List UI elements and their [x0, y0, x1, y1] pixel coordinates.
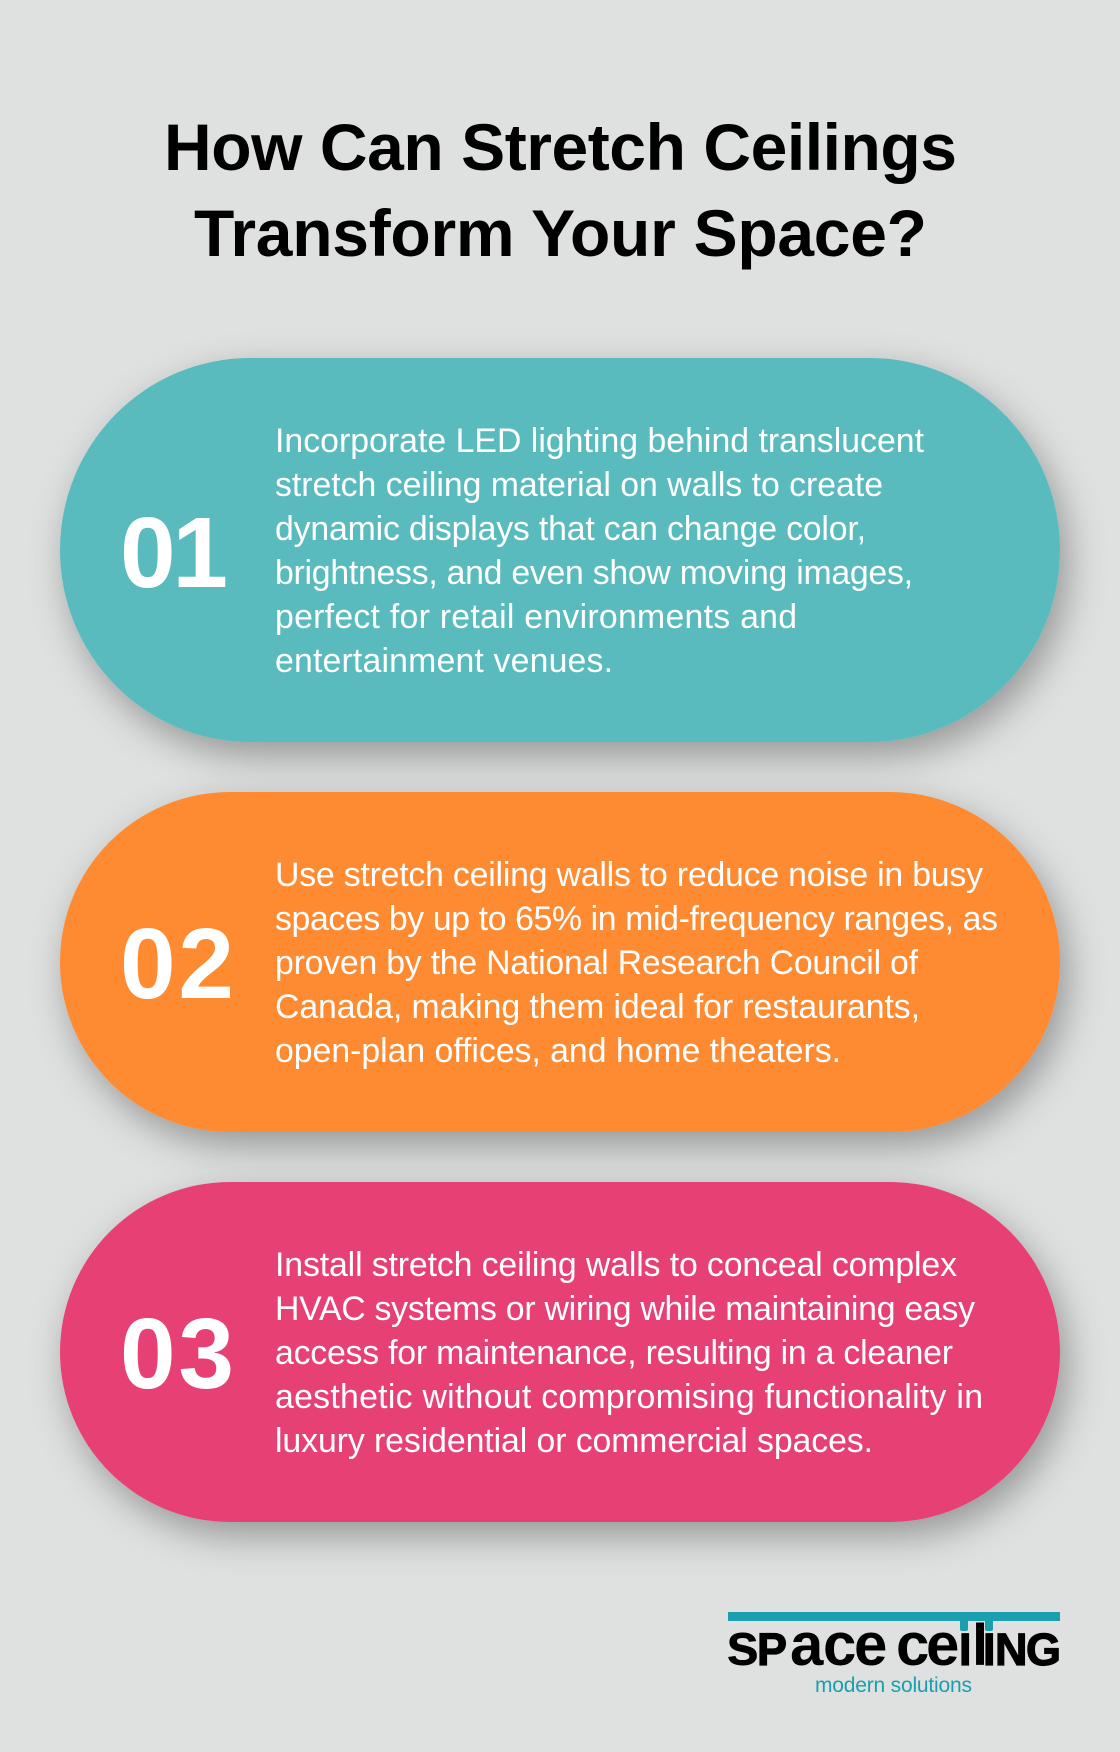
logo wordmark: I: [983, 1624, 996, 1675]
logo wordmark: s: [726, 1611, 759, 1678]
text block: step 01 description: Incorporate LED lighting behind translucent: [275, 422, 925, 460]
panel background: teal pill: [60, 358, 1060, 742]
logo wordmark: e: [854, 1611, 887, 1678]
text block: step 01 description: entertainment venues.: [275, 642, 613, 680]
text block: step 01 description: perfect for retail environments and: [275, 598, 797, 636]
title: Transform Your Space?: [194, 196, 927, 270]
text block: step 03 description: luxury residential or commercial spaces.: [275, 1422, 873, 1460]
logo wordmark: e: [926, 1611, 959, 1678]
logo wordmark: c: [896, 1611, 929, 1678]
logo wordmark: l: [972, 1613, 988, 1678]
text block: step 02 description: proven by the National Research Council of: [275, 944, 919, 982]
text block: step 03 description: access for maintenance, resulting in a cleaner: [275, 1334, 953, 1372]
text block: step 02 description: Canada, making them ideal for restaurants,: [275, 988, 920, 1026]
panel: step 02: [60, 792, 1060, 1132]
text block: step 03 description: Install stretch ceiling walls to conceal complex: [275, 1246, 957, 1284]
text block: step 03 description: [275, 1246, 983, 1460]
panel background: orange pill: [60, 792, 1060, 1132]
panel: step 01: [60, 358, 1060, 742]
panel background: pink pill: [60, 1182, 1060, 1522]
title: [164, 110, 957, 270]
panel: step 03: [60, 1182, 1060, 1522]
step number 02: 02: [120, 908, 234, 1020]
logo wordmark: P: [757, 1624, 787, 1675]
logo ceiling bar: [728, 1612, 1060, 1631]
text block: step 01 description: stretch ceiling material on walls to create: [275, 466, 883, 504]
text block: step 01 description: brightness, and even show moving images,: [275, 554, 913, 592]
logo wordmark: c: [823, 1611, 856, 1678]
logo: space ceiling: [726, 1611, 1061, 1697]
text block: step 02 description: spaces by up to 65% in mid-frequency ranges, as: [275, 900, 998, 938]
text block: step 01 description: dynamic displays that can change color,: [275, 510, 866, 548]
text block: step 02 description: open-plan offices, and home theaters.: [275, 1032, 841, 1070]
text block: step 02 description: Use stretch ceiling walls to reduce noise in busy: [275, 856, 983, 894]
step number 01: 01: [120, 497, 228, 609]
logo wordmark: N: [995, 1624, 1028, 1675]
logo tagline: modern solutions: [815, 1674, 972, 1697]
title: How Can Stretch Ceilings: [164, 110, 957, 184]
text block: step 02 description: [275, 856, 998, 1070]
logo wordmark: I: [959, 1624, 972, 1675]
text block: step 01 description: [275, 422, 925, 680]
logo wordmark: a: [790, 1611, 824, 1678]
logo wordmark: G: [1026, 1624, 1061, 1675]
step number 03: 03: [120, 1298, 234, 1410]
text block: step 03 description: HVAC systems or wiring while maintaining easy: [275, 1290, 975, 1328]
text block: step 03 description: aesthetic without compromising functionality in: [275, 1378, 983, 1416]
